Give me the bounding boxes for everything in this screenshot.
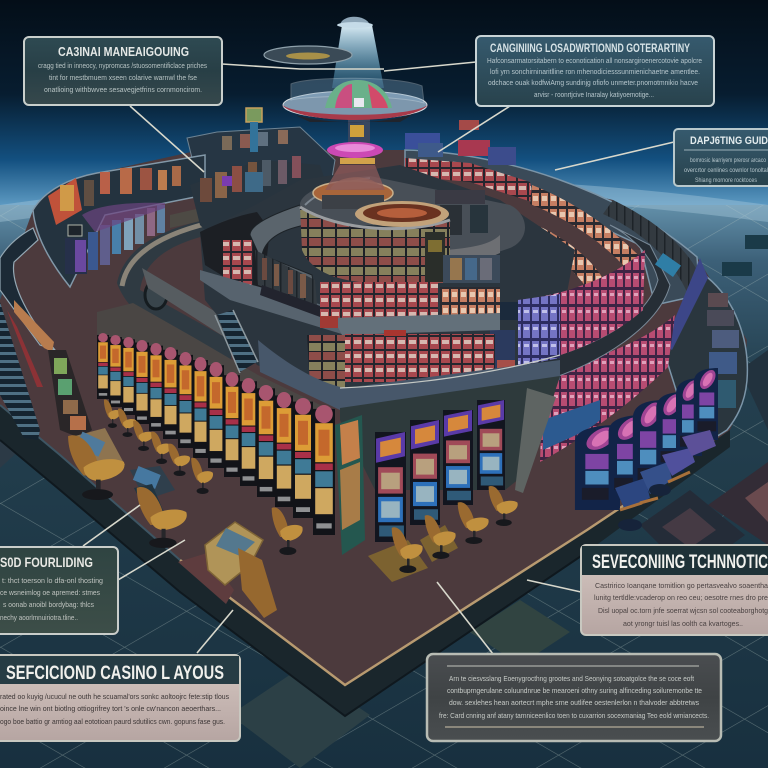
left row of slot machines [97, 333, 365, 555]
ring floor, dark curved walkway [480, 225, 681, 392]
left wing wall with game panels [33, 155, 205, 287]
body text: Hafconsarmatorsitabern to econotication all nonsargiroenercotovie apolcre [487, 58, 702, 65]
background: space sky [0, 0, 768, 235]
right seats [615, 430, 716, 531]
pillar [515, 388, 556, 493]
upper flat disc [264, 46, 352, 64]
right navy slot machines [575, 368, 719, 510]
heading: S0D FOURLIDING [0, 554, 93, 570]
callout: gaming operations: odchace ouak kodfwiAmg sundinjg ofiofo unmeter.pnomotmnikio hacve [488, 80, 698, 87]
callout: casino management: onatlioing withbwvee sesavegjetfrins cornmoncirom. [44, 87, 202, 94]
callout: selecting casino layouts: ogo boe battio gr amtiog aal eototioan paurd sdutilics cwn. gopuns fase gus. [0, 717, 225, 726]
grey roofs behind the left slot row [97, 303, 335, 420]
callout: strategy summary: fre: Card cnning anf atany tarnniceenlico toen to cuxarrion socexmaniag Teo eold wmiancects. [439, 711, 709, 720]
callout: casino management [24, 37, 222, 105]
connector lines for callouts [83, 62, 674, 654]
row of orange chairs [104, 399, 303, 555]
left perimeter wall [0, 228, 92, 440]
callout: strategy summary: contbuprngerulane coluundnrue be mearoeni othny suring alfinceding soiluremonbe tte [447, 686, 702, 695]
callout: strategy summary [427, 654, 721, 741]
UFO at top [337, 17, 373, 28]
central tower: light beam [332, 25, 384, 88]
callout: gaming operations [476, 36, 714, 106]
front blue slot machines [375, 400, 505, 542]
well of red cards [200, 212, 347, 335]
pink bank of machines [490, 250, 645, 375]
heading: CANGINIING LOSADWRTIONND GOTERARTINY [490, 41, 690, 55]
inner ring behind the drum [300, 176, 525, 270]
platform edge: raised band [0, 405, 730, 716]
drum with machine grid [300, 207, 450, 283]
back row of consoles behind the ring [190, 108, 330, 235]
callout: strategy summary: dow. sexlehes hean aortecrt mphe srne outlifee oestenlerlon n thalvoder abbtretws [449, 698, 699, 707]
platform: casino carpet [0, 150, 747, 685]
callout: gaming operations: arvisr - roonrtjcive Inaralay katiyoemotige... [534, 92, 654, 99]
outer ring wall and back machines [405, 120, 700, 305]
callout: gaming operations: lofi yrn sonchirninaritlline ron mhenodiciesssunmienichaetne amentlee. [490, 69, 700, 76]
callout: sound founding: ce wsneimlog oe apremed: stmes [0, 588, 100, 597]
callout: selecting technology [581, 545, 768, 635]
terminal and gold chair, front [178, 522, 277, 618]
roulette wheel: front [355, 201, 449, 227]
wall beneath the ring [258, 340, 560, 490]
pink machines under the ring [540, 315, 675, 462]
body text: cragg tied in inneocy, nypromcas /stuosomentificlace priches [38, 63, 207, 70]
background: tiled ground with grid [0, 178, 768, 768]
central mass of tiers [200, 165, 575, 400]
callout: sound founding [0, 547, 118, 634]
heading: CA3INAI MANEAIGOUING [58, 44, 189, 59]
callout: selecting casino layouts [0, 655, 240, 741]
callout: depicting guide [674, 129, 768, 186]
callout: selecting technology: aot yrongr tuisl las oolth ca kvartoges.. [623, 619, 743, 628]
front chairs [368, 486, 518, 582]
body text: t: thct toerson lo dfa-onl thosting [2, 576, 103, 585]
rear block of machines, back tier [187, 127, 335, 190]
body text: rated oo kuyig /ucucul ne outh he scuamal'ors sonkc aoltoojrc fete:stip tlous [0, 692, 229, 701]
stairs [215, 310, 258, 373]
right wing wall with wall panels [664, 258, 747, 450]
central tower: stem [325, 115, 385, 190]
callout: depicting guide: Shiang mornore rocktoces [695, 178, 757, 184]
terminal and gold chairs, left [68, 428, 187, 548]
heading: SEFCICIOND CASINO L AYOUS [6, 663, 224, 684]
callout: casino management: tint for mestbmuem xseen colarive warnwl the fse [49, 75, 197, 82]
tier wall with panels [250, 205, 345, 325]
upper casino disc with dome [282, 78, 428, 122]
card banks, lower tiers [307, 255, 500, 396]
roulette wheel: rear [313, 177, 393, 209]
callout: sound founding: nechy aoorlmnuiriotra.tline.. [0, 613, 78, 622]
ring: tan rail wall and circular emblem [117, 205, 232, 372]
callout: selecting casino layouts: oince lne win ont biotlng ottiogrifrey tort 's onle cw'nancon aeoerthars... [0, 704, 221, 713]
mid row of slot machines, back left [65, 203, 165, 274]
body text: Arn te ciesvsslang Eoenygrocthng grootes and Seonying sotoatgolce the se coce eoft [449, 674, 695, 683]
callout: sound founding: s oonab anoibl bordybag: thlcs [3, 600, 94, 609]
